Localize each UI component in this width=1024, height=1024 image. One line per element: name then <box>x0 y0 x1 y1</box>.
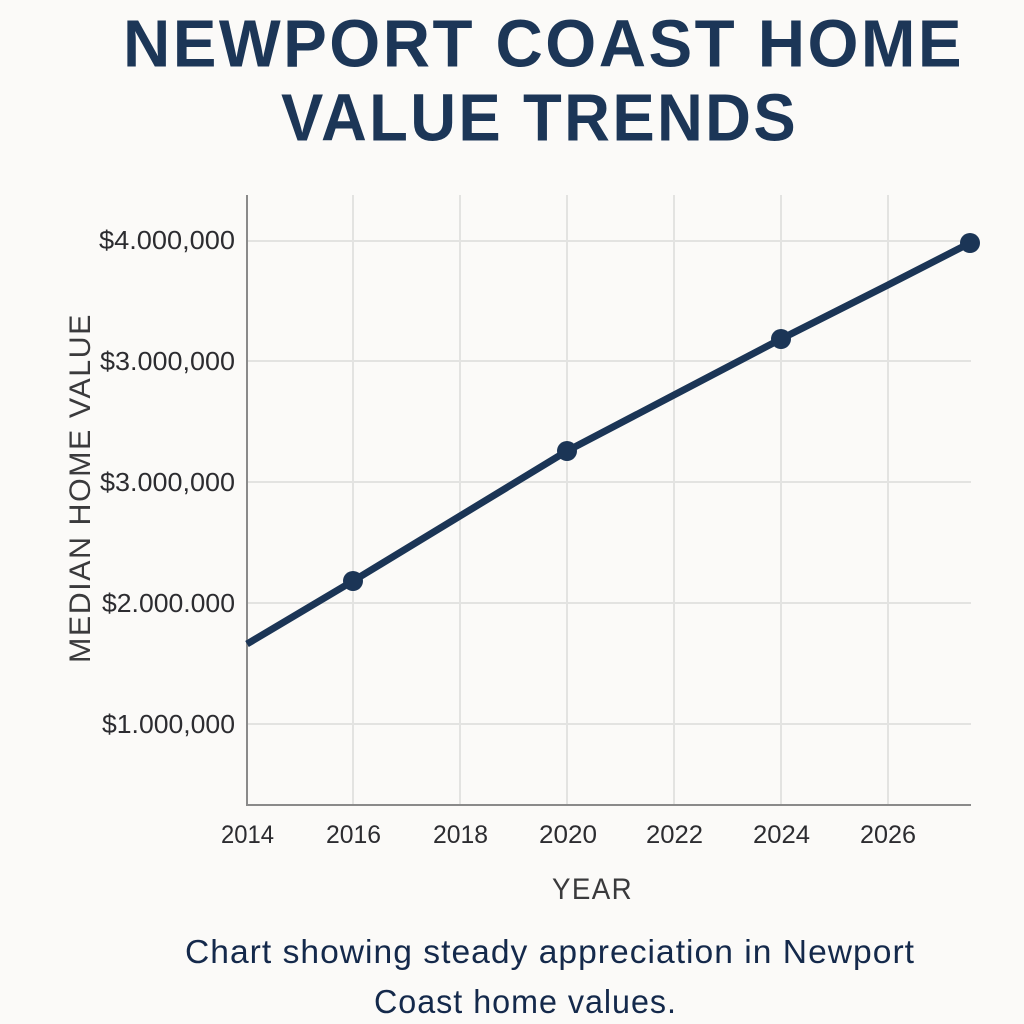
x-axis tick labels: 2022 <box>646 821 703 849</box>
title: VALUE TRENDS <box>281 80 798 156</box>
caption <box>185 933 915 1020</box>
line chart <box>64 195 980 906</box>
caption: Chart showing steady appreciation in Newport <box>185 933 915 970</box>
y-axis tick labels: $4.000,000 <box>99 225 235 255</box>
x-axis tick labels: 2024 <box>753 821 810 849</box>
data line <box>247 243 970 644</box>
caption: Coast home values. <box>374 983 677 1020</box>
x-axis tick labels: 2014 <box>221 821 274 849</box>
x-axis title: YEAR <box>552 873 633 906</box>
y-axis tick labels: $3.000,000 <box>100 467 235 497</box>
y-axis tick labels <box>99 225 235 739</box>
x-axis tick labels: 2016 <box>326 821 381 849</box>
y-axis tick labels: $2.000.000 <box>102 588 235 618</box>
x-axis tick labels <box>221 821 916 849</box>
y-axis tick labels: $3.000,000 <box>100 346 235 376</box>
title <box>123 6 964 156</box>
title: NEWPORT COAST HOME <box>123 6 964 82</box>
data points <box>343 233 980 591</box>
x-axis tick labels: 2026 <box>860 821 916 849</box>
y-axis tick labels: $1.000,000 <box>102 709 235 739</box>
axes <box>247 195 971 805</box>
y-axis title: MEDIAN HOME VALUE <box>64 313 97 663</box>
x-axis tick labels: 2018 <box>433 821 488 849</box>
x-axis tick labels: 2020 <box>539 821 597 849</box>
